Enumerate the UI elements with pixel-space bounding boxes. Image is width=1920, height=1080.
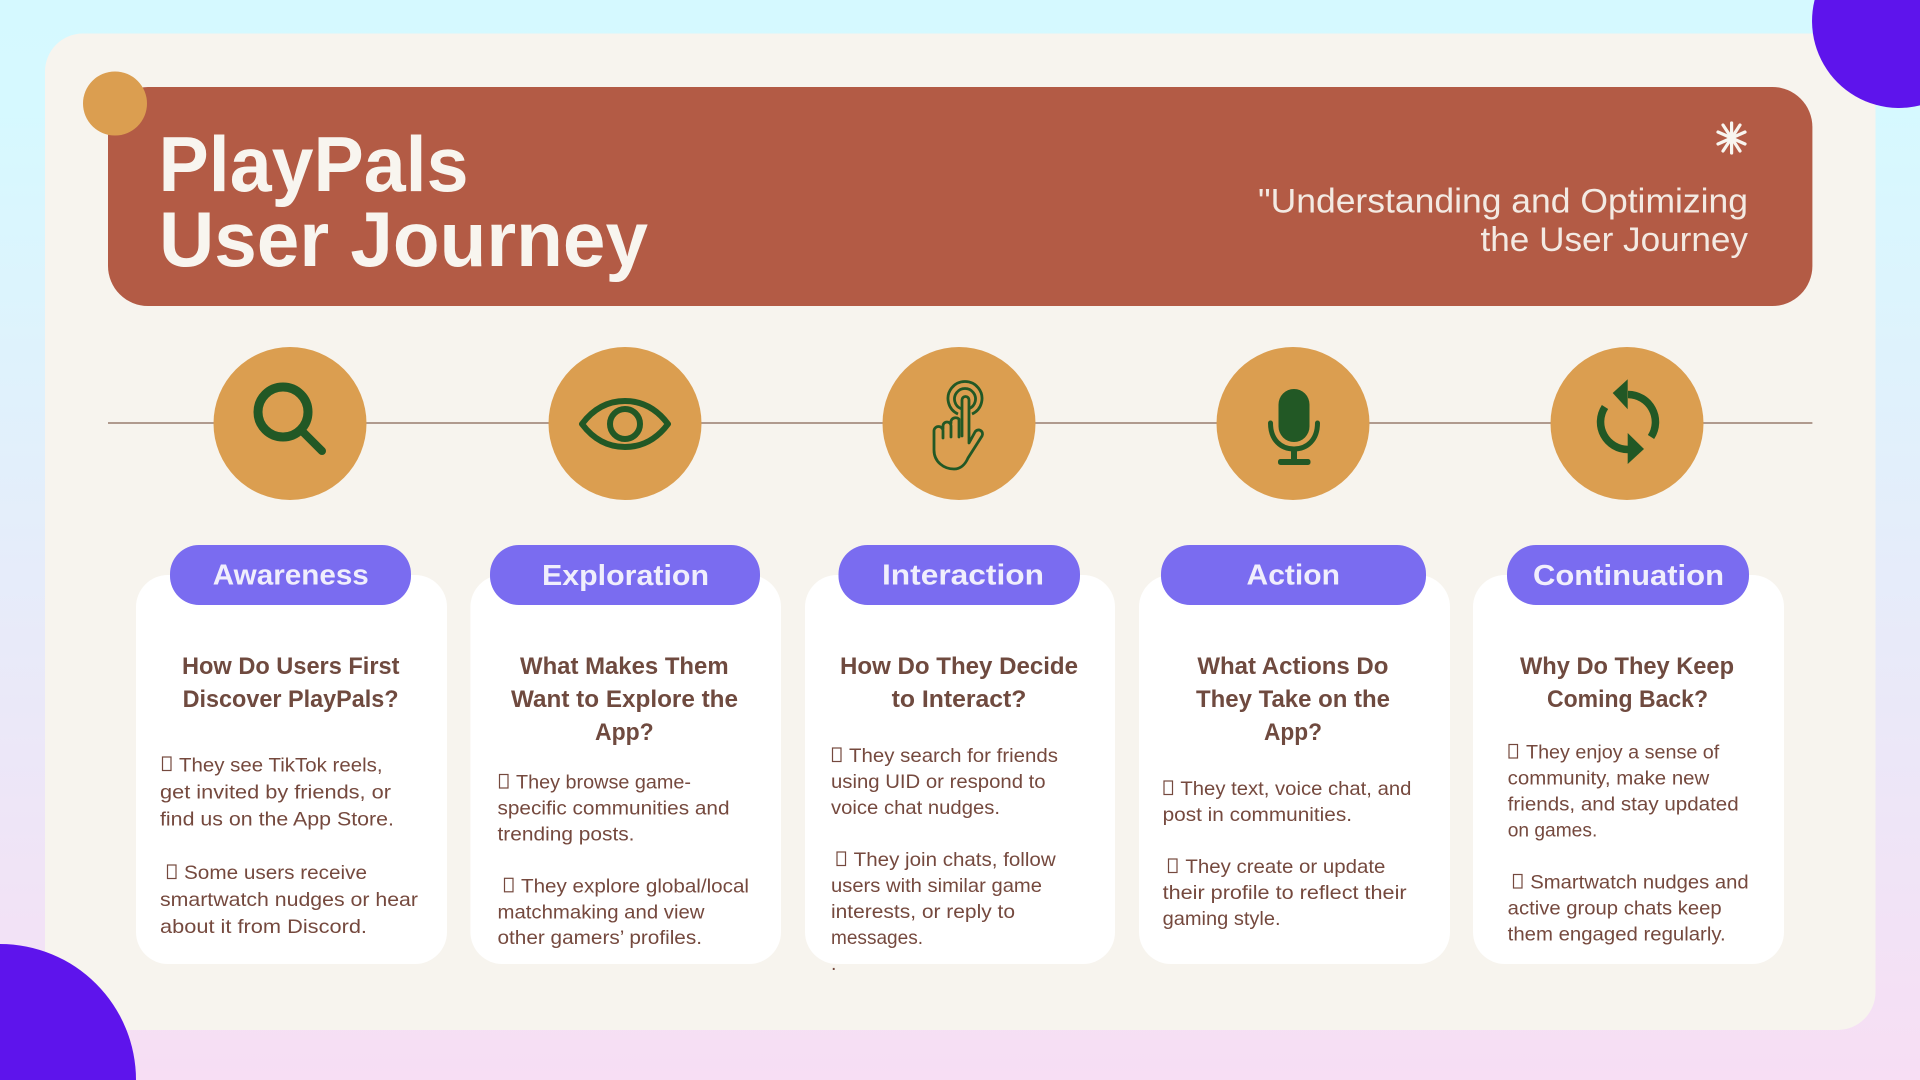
- body text: continuation: them engaged regularly.: [1508, 923, 1726, 945]
- step icon: touch: [882, 347, 1036, 500]
- body text: awareness: Some users receive: [184, 862, 367, 884]
- pill: awareness: [170, 545, 411, 605]
- body text: exploration: [498, 772, 749, 949]
- corner circle: top right: [1812, 0, 1920, 108]
- pill: action: [1161, 545, 1426, 605]
- heading: exploration: What Makes Them: [520, 653, 729, 680]
- pill label: interaction: Interaction: [882, 559, 1044, 591]
- body text: interaction: messages.: [831, 927, 923, 949]
- body text: continuation: Smartwatch nudges and: [1530, 871, 1749, 893]
- body text: action: post in communities.: [1163, 804, 1352, 826]
- body text: interaction: They join chats, follow: [854, 849, 1057, 871]
- heading: interaction: How Do They Decide: [840, 653, 1078, 680]
- title: User Journey: [159, 195, 648, 283]
- body text: awareness: find us on the App Store.: [160, 808, 394, 830]
- body text: exploration: They explore global/local: [521, 875, 749, 897]
- title: [158, 120, 648, 283]
- step icon: eye: [548, 347, 702, 500]
- subtitle: the User Journey: [1480, 221, 1748, 259]
- title: PlayPals: [158, 120, 468, 208]
- body text: continuation: They enjoy a sense of: [1526, 741, 1720, 763]
- pill label: exploration: Exploration: [542, 560, 709, 592]
- body text: continuation: friends, and stay updated: [1508, 793, 1739, 815]
- heading: awareness: Discover PlayPals?: [183, 686, 399, 713]
- panel: continuation: [1473, 545, 1784, 964]
- body text: continuation: active group chats keep: [1508, 897, 1722, 919]
- pill: exploration: [490, 545, 760, 605]
- step icon: microphone: [1216, 347, 1370, 500]
- body text: exploration: specific communities and: [498, 798, 730, 820]
- gold dot: [83, 72, 147, 136]
- body text: awareness: They see TikTok reels,: [179, 754, 383, 776]
- subtitle: "Understanding and Optimizing: [1258, 182, 1748, 220]
- heading: exploration: Want to Explore the: [511, 686, 738, 713]
- heading: action: They Take on the: [1196, 686, 1390, 713]
- body text: exploration: They browse game-: [516, 772, 691, 794]
- heading: continuation: Why Do They Keep: [1520, 653, 1734, 680]
- heading: action: [1196, 653, 1390, 746]
- panel: exploration: [470, 545, 781, 964]
- body text: interaction: .: [831, 953, 836, 975]
- body text: interaction: interests, or reply to: [831, 901, 1015, 923]
- icon: asterisk: [1718, 123, 1745, 153]
- heading: action: App?: [1264, 719, 1322, 746]
- body text: action: [1163, 778, 1411, 930]
- body text: interaction: users with similar game: [831, 875, 1042, 897]
- body text: action: They create or update: [1185, 856, 1385, 878]
- body text: awareness: [160, 754, 419, 938]
- pill label: continuation: Continuation: [1533, 560, 1724, 592]
- body text: awareness: get invited by friends, or: [160, 781, 392, 803]
- body text: continuation: community, make new: [1508, 767, 1710, 789]
- body text: continuation: on games.: [1508, 819, 1597, 841]
- body text: awareness: about it from Discord.: [160, 916, 367, 938]
- heading: exploration: App?: [595, 719, 654, 746]
- body text: exploration: other gamers’ profiles.: [498, 927, 702, 949]
- step icon: search: [214, 347, 366, 500]
- heading: exploration: [511, 653, 738, 746]
- body text: interaction: voice chat nudges.: [831, 797, 1000, 819]
- pill label: awareness: Awareness: [213, 560, 369, 592]
- heading: interaction: to Interact?: [892, 686, 1026, 713]
- header banner: [83, 72, 1812, 306]
- heading: awareness: How Do Users First: [182, 653, 400, 680]
- body text: exploration: matchmaking and view: [498, 901, 705, 923]
- panel: interaction: [805, 545, 1115, 975]
- panel: action: [1139, 545, 1450, 964]
- step icon: refresh: [1550, 347, 1704, 500]
- panel: awareness: [136, 545, 447, 964]
- heading: action: What Actions Do: [1197, 653, 1388, 680]
- body text: awareness: smartwatch nudges or hear: [160, 889, 419, 911]
- body text: interaction: using UID or respond to: [831, 771, 1046, 793]
- body text: action: They text, voice chat, and: [1180, 778, 1411, 800]
- pill: interaction: [838, 545, 1080, 605]
- body text: action: their profile to reflect their: [1163, 882, 1407, 904]
- body text: interaction: They search for friends: [849, 745, 1058, 767]
- heading: continuation: Coming Back?: [1547, 686, 1708, 713]
- body text: interaction: [831, 745, 1058, 975]
- heading: awareness: [182, 653, 400, 713]
- heading: continuation: [1520, 653, 1734, 713]
- corner circle: bottom left: [0, 944, 136, 1080]
- heading: interaction: [840, 653, 1078, 713]
- pill: continuation: [1507, 545, 1749, 605]
- subtitle: [1258, 182, 1748, 259]
- pill label: action: Action: [1246, 559, 1340, 591]
- body text: action: gaming style.: [1163, 908, 1281, 930]
- body text: exploration: trending posts.: [498, 823, 634, 845]
- body text: continuation: [1508, 741, 1749, 945]
